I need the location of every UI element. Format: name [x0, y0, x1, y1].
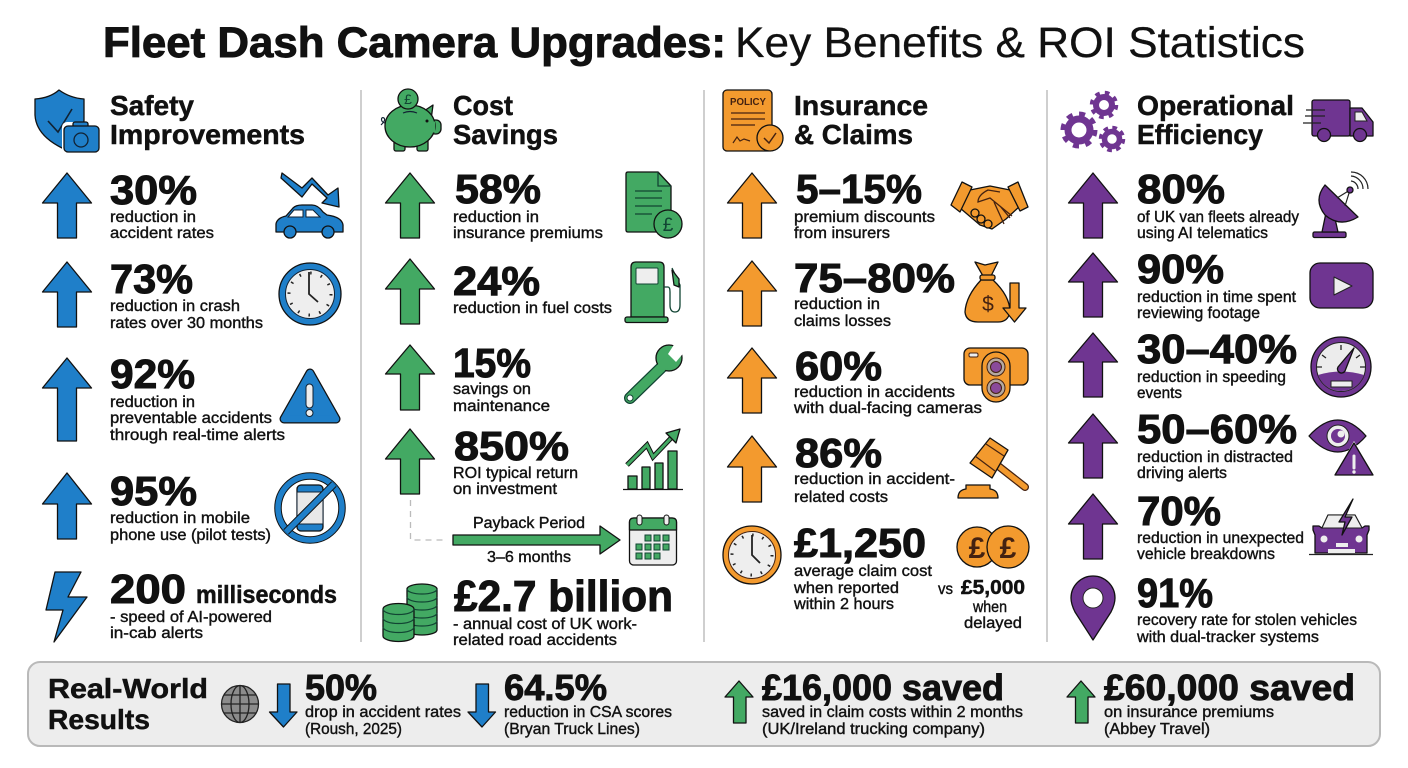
icon: pound coins: £	[1000, 532, 1017, 565]
value: £16,000 saved	[762, 667, 1004, 708]
heading: real-world results	[48, 673, 208, 735]
stat: 5-15%	[728, 166, 1028, 242]
stat: 73%	[42, 256, 341, 332]
icon: eye with warning	[1309, 420, 1375, 477]
description	[110, 298, 263, 332]
icon: gears	[1063, 93, 1123, 150]
icon: money bag with down arrow: $	[982, 293, 994, 316]
description: (Bryan Truck Lines)	[504, 721, 640, 738]
heading: insurance and claims: Insurance	[794, 90, 928, 121]
stat: 200 milliseconds	[46, 566, 337, 642]
heading: real-world results: Real-World	[48, 673, 208, 704]
description: average claim cost	[794, 563, 933, 580]
value: 30%	[110, 167, 197, 213]
description: (Roush, 2025)	[305, 721, 402, 738]
icon: piggy bank	[381, 89, 441, 151]
value: 91%	[1137, 570, 1213, 616]
title: Fleet Dash Camera Upgrades:	[103, 19, 726, 67]
arrow: down	[468, 684, 496, 727]
value: 95%	[110, 468, 197, 514]
description	[453, 616, 637, 649]
description: on insurance premiums	[1104, 704, 1274, 721]
description: claims losses	[794, 313, 891, 330]
value	[110, 566, 337, 612]
description: ROI typical return	[453, 465, 578, 482]
description: reduction in CSA scores	[504, 704, 672, 721]
description	[793, 384, 982, 417]
arrow: up	[42, 262, 92, 327]
icon: handshake	[951, 182, 1028, 229]
icon: policy document: POLICY	[730, 97, 766, 108]
value: 5–15%	[796, 166, 922, 212]
value: 90%	[1137, 246, 1224, 292]
heading: real-world results: Results	[48, 704, 150, 735]
stat: £2.7 billion	[383, 572, 673, 649]
arrow: up	[1067, 681, 1095, 723]
description: accident rates	[110, 225, 214, 242]
value: 92%	[110, 351, 195, 397]
description: premium discounts	[794, 209, 935, 226]
value: 50%	[305, 667, 377, 708]
stat: 90%	[1068, 246, 1373, 322]
icon: no phone	[278, 476, 342, 540]
description: reduction in crash	[110, 298, 240, 315]
description	[1137, 449, 1293, 482]
stat: 50-60%	[1068, 406, 1375, 482]
description: events	[1137, 385, 1182, 402]
delayed value: £5,000	[961, 577, 1025, 599]
description: with dual-facing cameras	[793, 400, 982, 417]
description: using AI telematics	[1137, 225, 1268, 242]
description	[110, 510, 271, 544]
description	[110, 209, 214, 242]
icon: pound coins: £	[969, 532, 986, 565]
description: reduction in distracted	[1137, 449, 1293, 466]
description	[762, 704, 1023, 738]
description	[794, 296, 891, 330]
description: reduction in mobile	[110, 510, 250, 527]
arrow: up	[1068, 253, 1118, 317]
stat: 91%	[1071, 570, 1357, 646]
icon: warning triangle	[284, 373, 336, 419]
label: 3-6 months: 3–6 months	[487, 549, 571, 566]
arrow: up	[386, 429, 434, 494]
value: 58%	[455, 166, 541, 212]
value: 30–40%	[1137, 326, 1297, 372]
heading: cost savings	[453, 90, 558, 150]
arrow: up	[728, 173, 776, 238]
description: reduction in	[794, 296, 880, 313]
stat: 80%	[1068, 166, 1368, 242]
description	[305, 704, 461, 738]
icon: wrench	[627, 343, 686, 401]
description: reduction in	[110, 209, 196, 226]
description: from insurers	[794, 225, 890, 242]
heading: cost savings: Cost	[453, 90, 513, 121]
arrow: up	[1068, 414, 1118, 478]
description: when reported	[793, 580, 899, 597]
arrow: up	[42, 473, 92, 539]
description: insurance premiums	[453, 225, 603, 242]
arrow: payback timeline	[453, 526, 620, 554]
value: milliseconds	[196, 581, 337, 609]
panel: insurance and claims	[723, 90, 1029, 632]
description: - annual cost of UK work-	[453, 616, 637, 633]
stat: 15%	[386, 340, 686, 415]
icon: document with pound: £	[663, 215, 674, 236]
description: (UK/Ireland trucking company)	[762, 721, 985, 738]
value: £2.7 billion	[454, 572, 673, 621]
arrow: up	[725, 681, 753, 723]
description: saved in claim costs within 2 months	[762, 704, 1023, 721]
delayed value: when	[972, 599, 1007, 616]
description: through real-time alerts	[110, 427, 285, 444]
description: in-cab alerts	[110, 625, 203, 642]
panel: safety improvements	[35, 90, 343, 642]
description: drop in accident rates	[305, 704, 461, 721]
description	[1137, 369, 1286, 402]
description	[1136, 612, 1357, 646]
description: reduction in fuel costs	[453, 300, 612, 317]
stat: 95%	[42, 468, 342, 544]
arrow: up	[386, 345, 434, 410]
value: 850%	[454, 423, 569, 469]
result: 64.5%	[468, 667, 672, 738]
icon: clock	[723, 526, 781, 584]
heading: insurance and claims: & Claims	[794, 119, 913, 150]
title	[103, 19, 1305, 67]
result: 50%	[270, 667, 461, 738]
icon: dual-facing camera	[964, 348, 1028, 402]
description: reduction in time spent	[1137, 289, 1297, 306]
stat: 70%	[1068, 488, 1373, 563]
value: 73%	[110, 256, 193, 302]
arrow: down	[270, 684, 297, 727]
title: Key Benefits & ROI Statistics	[735, 19, 1305, 67]
panel: real-world results	[28, 662, 1380, 746]
heading: safety improvements	[110, 90, 305, 150]
payback period	[410, 500, 676, 566]
description	[1137, 530, 1304, 563]
arrow: up	[728, 348, 776, 413]
description: on investment	[453, 481, 558, 498]
description: reduction in speeding	[1137, 369, 1286, 386]
stat: 92%	[42, 351, 336, 444]
arrow: up	[386, 173, 434, 238]
label: vs: vs	[938, 581, 953, 598]
arrow: up	[1068, 173, 1118, 238]
description	[794, 209, 935, 242]
heading: insurance and claims	[794, 90, 928, 150]
stat: 30%	[42, 167, 343, 242]
stat: 30-40%	[1068, 326, 1371, 402]
heading: cost savings: Savings	[453, 119, 558, 150]
value: 70%	[1137, 488, 1221, 534]
arrow: up	[42, 358, 92, 441]
value: £60,000 saved	[1104, 667, 1355, 708]
icon: moving truck	[1303, 100, 1373, 142]
icon: speedometer	[1311, 337, 1371, 397]
icon: piggy bank: £	[404, 91, 412, 107]
description	[453, 209, 603, 242]
icon: shield with camera	[35, 90, 101, 154]
description: reviewing footage	[1137, 305, 1260, 322]
panel: cost savings	[381, 89, 686, 649]
icon: clock	[279, 263, 341, 325]
stat: 86%	[728, 430, 1025, 506]
value: 60%	[795, 343, 882, 389]
description: of UK van fleets already	[1137, 209, 1299, 226]
description: reduction in unexpected	[1137, 530, 1304, 547]
stat: £1,250 claim cost comparison	[723, 520, 1029, 632]
heading: operational efficiency	[1137, 90, 1294, 150]
arrow: up	[1068, 494, 1118, 559]
stat: 850%	[386, 423, 683, 498]
icon: satellite dish	[1313, 172, 1368, 238]
stat: 24%	[386, 258, 680, 324]
description	[1137, 209, 1299, 242]
label: payback period: Payback Period	[473, 515, 585, 532]
value: £1,250	[794, 520, 926, 566]
icon: location pin	[1071, 576, 1115, 640]
description: savings on	[453, 381, 531, 398]
icon: fuel pump	[625, 262, 680, 322]
icon: lightning bolt	[46, 572, 87, 642]
description	[793, 563, 933, 613]
stat: 60%	[728, 343, 1028, 417]
arrow: up	[1068, 333, 1118, 397]
description: with dual-tracker systems	[1136, 629, 1319, 646]
delayed value	[961, 577, 1025, 632]
description: - speed of AI-powered	[110, 609, 272, 626]
value: 64.5%	[504, 667, 607, 708]
value: 86%	[795, 430, 882, 476]
result: £60,000 saved	[1067, 667, 1355, 738]
icon: gavel	[958, 438, 1025, 498]
heading: operational efficiency: Operational	[1137, 90, 1294, 121]
icon: coin stacks	[383, 584, 437, 642]
description: reduction in accident-	[794, 471, 955, 488]
value: 24%	[453, 258, 540, 304]
description	[110, 609, 272, 642]
description	[794, 471, 955, 506]
arrow: up	[728, 261, 776, 326]
value: 80%	[1137, 166, 1225, 212]
value: 200	[110, 566, 186, 612]
icon: broken-down car	[1309, 499, 1373, 554]
description	[1137, 289, 1297, 322]
heading: operational efficiency: Efficiency	[1137, 119, 1263, 150]
panel: operational efficiency	[1063, 90, 1375, 646]
value: 75–80%	[794, 255, 955, 301]
description: recovery rate for stolen vehicles	[1137, 612, 1357, 629]
description	[110, 394, 285, 444]
heading: safety improvements: Safety	[110, 90, 194, 121]
icon: policy document	[723, 90, 783, 151]
description: rates over 30 months	[110, 315, 263, 332]
description: reduction in accidents	[794, 384, 955, 401]
description	[1104, 704, 1274, 738]
icon: rising bar chart	[623, 429, 683, 490]
description: vehicle breakdowns	[1137, 546, 1275, 563]
result: £16,000 saved	[725, 667, 1023, 738]
description: reduction in	[453, 209, 539, 226]
stat: 75-80%	[728, 255, 1026, 330]
icon: pound coins	[957, 526, 1029, 568]
value: 15%	[453, 340, 531, 386]
description: maintenance	[453, 398, 550, 415]
arrow: up	[42, 173, 92, 238]
description	[453, 381, 550, 415]
icon: calendar	[630, 515, 676, 565]
arrow: up	[728, 436, 776, 502]
heading: safety improvements: Improvements	[110, 119, 305, 150]
description	[453, 465, 578, 498]
description: within 2 hours	[793, 596, 894, 613]
description: related road accidents	[453, 632, 617, 649]
icon: money bag with down arrow	[965, 262, 1026, 322]
description: preventable accidents	[110, 410, 272, 427]
description: (Abbey Travel)	[1104, 721, 1210, 738]
icon: video play	[1310, 263, 1373, 308]
arrow: up	[386, 259, 434, 324]
value: 50–60%	[1137, 406, 1297, 452]
description	[504, 704, 672, 738]
stat: 58%	[386, 166, 682, 242]
delayed value: delayed	[964, 615, 1022, 632]
description: related costs	[794, 489, 888, 506]
icon: car with falling arrow	[276, 173, 343, 238]
description: phone use (pilot tests)	[110, 527, 271, 544]
description: reduction in	[110, 394, 195, 411]
icon: globe	[222, 686, 258, 722]
icon: document with pound	[626, 172, 682, 238]
description: driving alerts	[1137, 465, 1227, 482]
